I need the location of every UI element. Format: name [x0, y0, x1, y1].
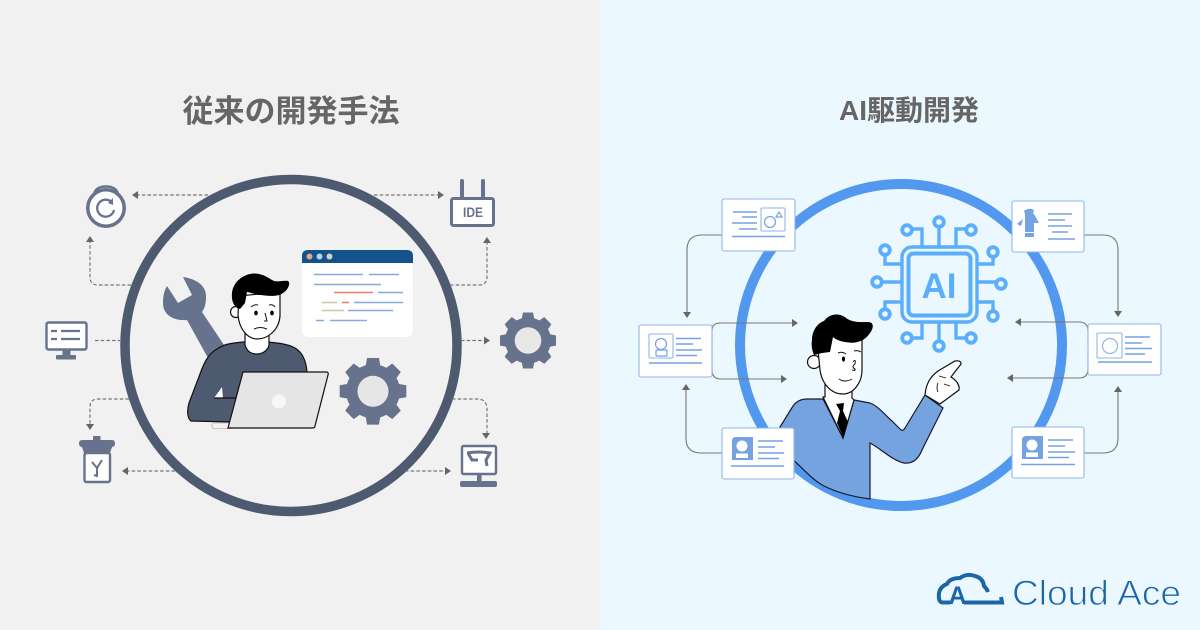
logo: Cloud Ace: A	[948, 582, 967, 610]
card: right middle circle picture	[1088, 324, 1161, 375]
card: top left image and text	[722, 199, 795, 251]
AI chip icon	[872, 217, 1006, 351]
dark ring	[125, 180, 457, 512]
arrow: from circle to lower right monitor	[405, 467, 451, 475]
arrow: to right gear	[461, 336, 490, 344]
arrow: to trash	[86, 399, 129, 430]
heading: AI driven development: AI駆動開発	[839, 95, 979, 126]
icon: IDE device: IDE	[463, 204, 483, 220]
inner gear	[340, 358, 406, 425]
panel: AI driven development	[639, 95, 1181, 613]
logo: Cloud Ace	[939, 574, 1181, 613]
icon: trash can	[79, 436, 115, 482]
connector arrows	[682, 235, 1122, 453]
card: bottom left filled portrait	[722, 428, 794, 479]
arrow: to IDE	[374, 191, 444, 199]
heading: traditional development: 従来の開発手法	[182, 94, 400, 129]
icon: right gear	[500, 312, 556, 368]
arrow: to lower right monitor	[452, 399, 490, 439]
blue ring	[740, 184, 1062, 506]
arrow: up to IDE	[450, 237, 491, 285]
arrow: from monitor	[95, 340, 120, 342]
arrow: from circle to trash	[122, 467, 175, 475]
card: top right figure and text	[1012, 201, 1084, 252]
pointing businessman	[780, 315, 961, 499]
AI chip icon: AI	[922, 267, 956, 306]
card: bottom right filled portrait	[1012, 427, 1084, 478]
code window	[302, 250, 413, 337]
icon: lower right monitor	[460, 446, 497, 487]
arrow: to clock	[132, 191, 208, 199]
logo: Cloud Ace: Cloud Ace	[1012, 574, 1181, 613]
icon: monitor	[46, 322, 86, 360]
icon: IDE device	[452, 181, 494, 226]
panel: traditional development	[46, 94, 556, 512]
worried developer with laptop	[188, 273, 328, 428]
arrow: up to clock	[86, 236, 131, 285]
card: left middle outline portrait	[639, 325, 712, 377]
icon: wrench	[163, 277, 224, 358]
icon: clock	[88, 186, 124, 226]
